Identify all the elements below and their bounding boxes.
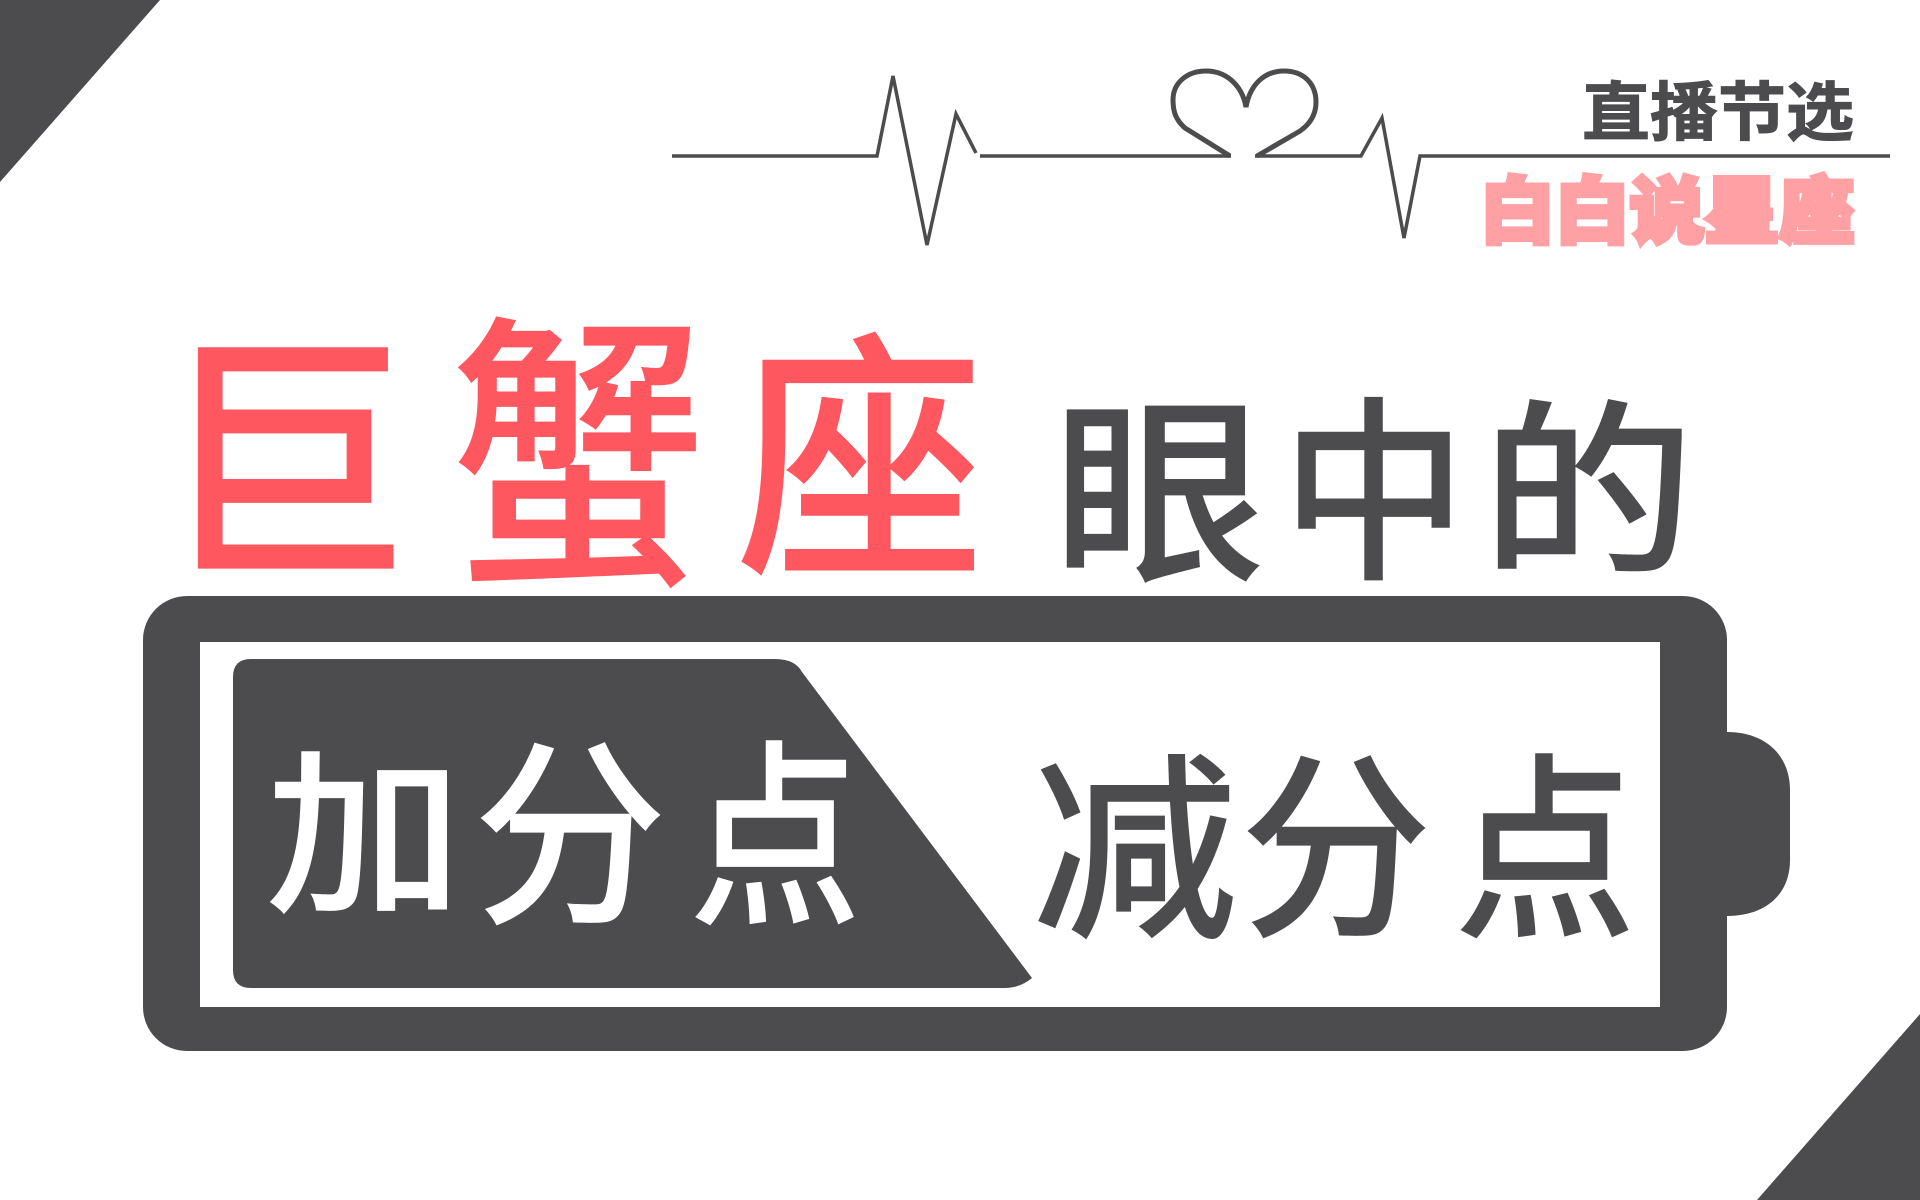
label: plus points bbox=[265, 727, 861, 952]
label: channel name: 白白说星座 bbox=[1480, 173, 1854, 253]
label: plus points: 点 bbox=[689, 728, 861, 952]
title: dark text: 中 bbox=[1281, 385, 1467, 606]
title: red zodiac sign: 巨 bbox=[160, 317, 412, 613]
label: minus points bbox=[1032, 740, 1636, 965]
title: red zodiac sign: 蟹 bbox=[450, 300, 706, 624]
label: plus points: 加 bbox=[265, 738, 463, 937]
title: dark text bbox=[1052, 385, 1696, 608]
battery charge fill bbox=[233, 659, 1032, 988]
title: red zodiac sign bbox=[160, 300, 984, 624]
label: minus points: 分 bbox=[1240, 740, 1432, 964]
label: minus points: 减 bbox=[1032, 742, 1238, 965]
battery body bbox=[143, 596, 1727, 1051]
label: live excerpt: 直播节选 bbox=[1582, 77, 1854, 149]
battery interior bbox=[200, 642, 1660, 1007]
label: minus points: 点 bbox=[1454, 741, 1636, 965]
title bbox=[160, 300, 1696, 624]
battery bbox=[143, 596, 1790, 1051]
heartbeat line with heart bbox=[672, 71, 1890, 245]
title: dark text: 眼 bbox=[1052, 385, 1266, 608]
title: red zodiac sign: 座 bbox=[736, 319, 984, 611]
label: plus points: 分 bbox=[473, 727, 667, 951]
title: dark text: 的 bbox=[1480, 388, 1696, 598]
corner triangle: bottom right bbox=[1757, 1014, 1920, 1200]
corner triangle: top left bbox=[0, 0, 160, 182]
battery terminal bbox=[1720, 732, 1790, 916]
